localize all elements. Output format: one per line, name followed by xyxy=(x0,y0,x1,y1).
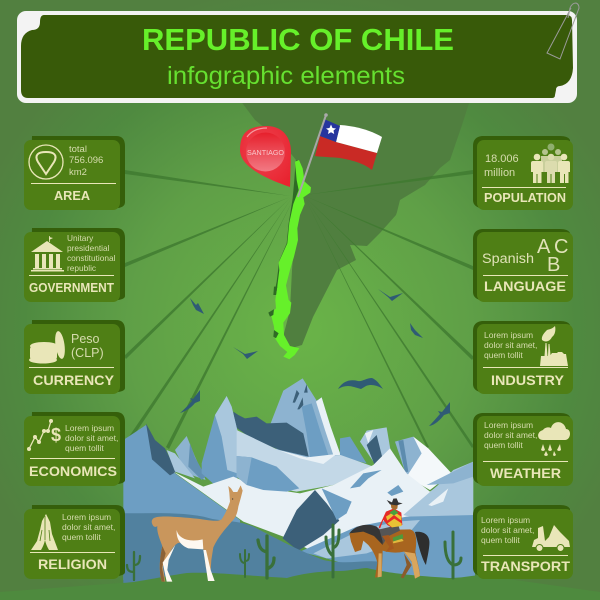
panel: government: presidential xyxy=(67,243,110,253)
icon: factory with smoke xyxy=(540,326,568,366)
cactus row xyxy=(127,525,461,580)
panel: area xyxy=(24,136,125,210)
panel: religion: dolor sit amet, xyxy=(62,522,115,532)
panel: currency xyxy=(24,320,125,394)
panel: transport: quem tollit xyxy=(481,535,520,545)
map: South America silhouette xyxy=(240,100,470,348)
panel: area: 756.096 xyxy=(69,155,103,166)
panel: industry: dolor sit amet, xyxy=(484,340,537,350)
rays from Chile to the panels xyxy=(124,170,474,449)
panel: area: km2 xyxy=(69,167,87,178)
panel: religion: RELIGION xyxy=(38,556,107,572)
guanaco xyxy=(152,485,243,582)
icon: rain cloud xyxy=(538,422,570,456)
pin label: SANTIAGO xyxy=(247,148,284,157)
panel: language xyxy=(473,229,573,302)
panel: government: constitutional xyxy=(67,253,116,263)
panel: transport xyxy=(473,505,573,579)
letters A B C: A xyxy=(537,236,551,258)
panel: religion xyxy=(24,505,125,579)
panel: industry: INDUSTRY xyxy=(491,372,565,388)
panel: economics: dolor sit amet, xyxy=(65,433,118,443)
panel: transport: TRANSPORT xyxy=(481,558,570,574)
icon: dump truck xyxy=(532,525,570,552)
panel: religion: Lorem ipsum xyxy=(62,512,111,522)
panel: transport: Lorem ipsum xyxy=(481,515,530,525)
panel: population: million xyxy=(484,167,515,179)
panel: currency: (CLP) xyxy=(71,346,104,360)
panel: weather: quem tollit xyxy=(484,440,523,450)
icon: coins xyxy=(29,331,66,364)
icon: group of people xyxy=(531,144,570,183)
panel: language: LANGUAGE xyxy=(484,278,566,294)
panel: transport: dolor sit amet, xyxy=(481,525,534,535)
icon: map pin xyxy=(29,145,63,179)
panel: weather: dolor sit amet, xyxy=(484,430,537,440)
letters A B C: C xyxy=(554,236,568,258)
panel: weather: Lorem ipsum xyxy=(484,420,533,430)
icon: praying hands xyxy=(31,514,58,550)
panel: economics: Lorem ipsum xyxy=(65,423,114,433)
panel: currency: Peso xyxy=(71,332,100,346)
subtitle: infographic elements xyxy=(167,62,405,90)
location pin: Santiago xyxy=(240,126,291,187)
horse and rider xyxy=(349,498,429,579)
Chile map shape xyxy=(268,160,311,359)
panel: government: republic xyxy=(67,263,96,273)
panel: area: total xyxy=(69,144,87,155)
panel: government xyxy=(24,228,125,302)
letters A B C: B xyxy=(547,254,560,276)
panel: population xyxy=(473,136,573,210)
panel: population: 18.006 xyxy=(485,153,519,165)
panel: language: Spanish xyxy=(482,251,534,266)
panel: weather xyxy=(473,413,573,486)
panel: religion: quem tollit xyxy=(62,532,101,542)
panel: government: GOVERNMENT xyxy=(29,281,114,295)
paper clip xyxy=(547,3,579,59)
birds xyxy=(180,289,450,426)
flag of Chile xyxy=(298,113,382,197)
panel: population: POPULATION xyxy=(484,190,566,205)
icon: columned building xyxy=(31,236,64,272)
panel: area: AREA xyxy=(54,189,90,203)
title: REPUBLIC OF CHILE xyxy=(142,22,454,57)
panel: currency: CURRENCY xyxy=(33,372,115,388)
panel: economics xyxy=(24,412,125,486)
panel: industry xyxy=(473,321,573,394)
panel: industry: quem tollit xyxy=(484,350,523,360)
banner xyxy=(17,3,579,103)
letters A B C xyxy=(537,236,568,276)
panel: economics: ECONOMICS xyxy=(29,463,117,479)
panel: weather: WEATHER xyxy=(490,465,561,481)
panel: economics: quem tollit xyxy=(65,443,104,453)
icon: growth chart with dollar: $ xyxy=(51,425,61,445)
panel: industry: Lorem ipsum xyxy=(484,330,533,340)
ground xyxy=(0,568,600,600)
panel: government: Unitary xyxy=(67,233,94,243)
mountains xyxy=(123,378,475,583)
